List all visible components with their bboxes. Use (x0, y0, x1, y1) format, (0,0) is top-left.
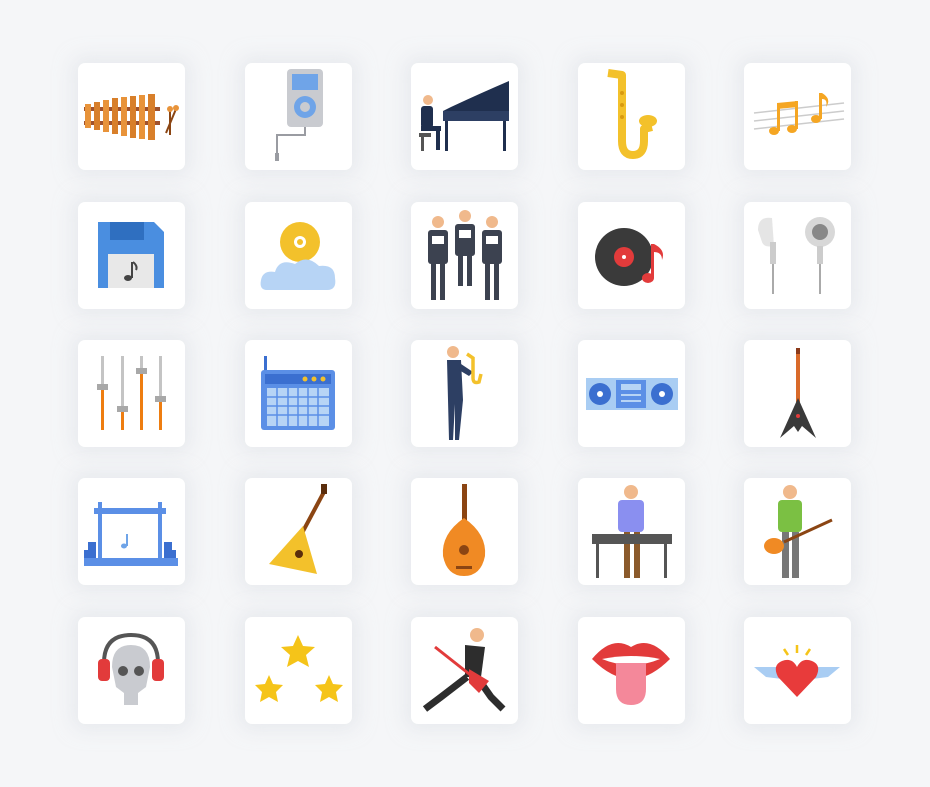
tile: rock guitarist (411, 617, 518, 724)
tile: xylophone (78, 63, 185, 170)
tile: balalaika (245, 478, 352, 585)
tile: radio (245, 340, 352, 447)
tile: three stars (245, 617, 352, 724)
tile: cd cloud (245, 202, 352, 309)
tile: flying v guitar (744, 340, 851, 447)
tile: stage (78, 478, 185, 585)
tile: saxophonist (411, 340, 518, 447)
tile: sliders (78, 340, 185, 447)
tile: pianist (411, 63, 518, 170)
tile: keyboardist (578, 478, 685, 585)
tile: lute (411, 478, 518, 585)
tile: winged heart (744, 617, 851, 724)
tile: vinyl record (578, 202, 685, 309)
tile: mp3 player (245, 63, 352, 170)
tile: music notes (744, 63, 851, 170)
tile: skull headphones (78, 617, 185, 724)
tile: dj deck (578, 340, 685, 447)
tile: earphones (744, 202, 851, 309)
tile: guitarist (744, 478, 851, 585)
tile: floppy (78, 202, 185, 309)
tile: saxophone (578, 63, 685, 170)
tile: lips tongue (578, 617, 685, 724)
tile: choir (411, 202, 518, 309)
